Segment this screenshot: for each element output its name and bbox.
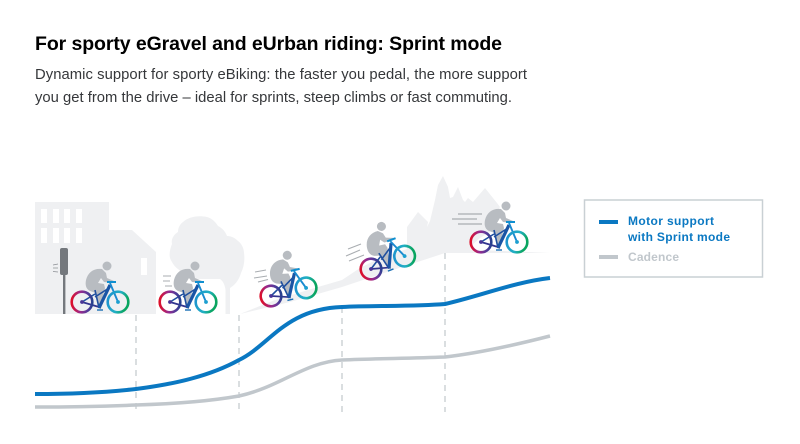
illustration: forest and hill <box>240 176 550 314</box>
cyclist 5 <box>471 202 527 252</box>
chart line: cadence <box>35 336 550 407</box>
cyclist 2 speed lines <box>163 276 172 286</box>
cyclist 1 <box>72 262 128 312</box>
title: For sporty eGravel and eUrban riding: Sprint mode <box>35 33 502 55</box>
cyclist 3 <box>252 246 318 308</box>
intro text: you get from the drive – ideal for sprints, steep climbs or fast commuting. <box>35 90 512 106</box>
legend: motor support: with Sprint mode <box>627 230 730 244</box>
legend: cadence: Cadence <box>628 250 679 264</box>
illustration: city buildings <box>35 202 156 314</box>
cyclist 3 speed lines <box>254 270 268 282</box>
cyclist 5 speed lines <box>452 214 482 224</box>
cyclist 2 <box>160 262 216 312</box>
legend: motor support: Motor support <box>628 214 714 228</box>
illustration: tree <box>170 216 244 314</box>
cyclist 4 speed lines <box>346 244 364 261</box>
legend: motor support <box>599 214 730 244</box>
legend: cadence <box>599 250 679 264</box>
intro text: Dynamic support for sporty eBiking: the faster you pedal, the more support <box>35 67 527 83</box>
intro text <box>35 67 527 106</box>
chart line: motor support <box>35 278 550 394</box>
legend <box>584 200 762 277</box>
cyclist 4 <box>347 215 418 282</box>
traffic light <box>53 248 68 314</box>
